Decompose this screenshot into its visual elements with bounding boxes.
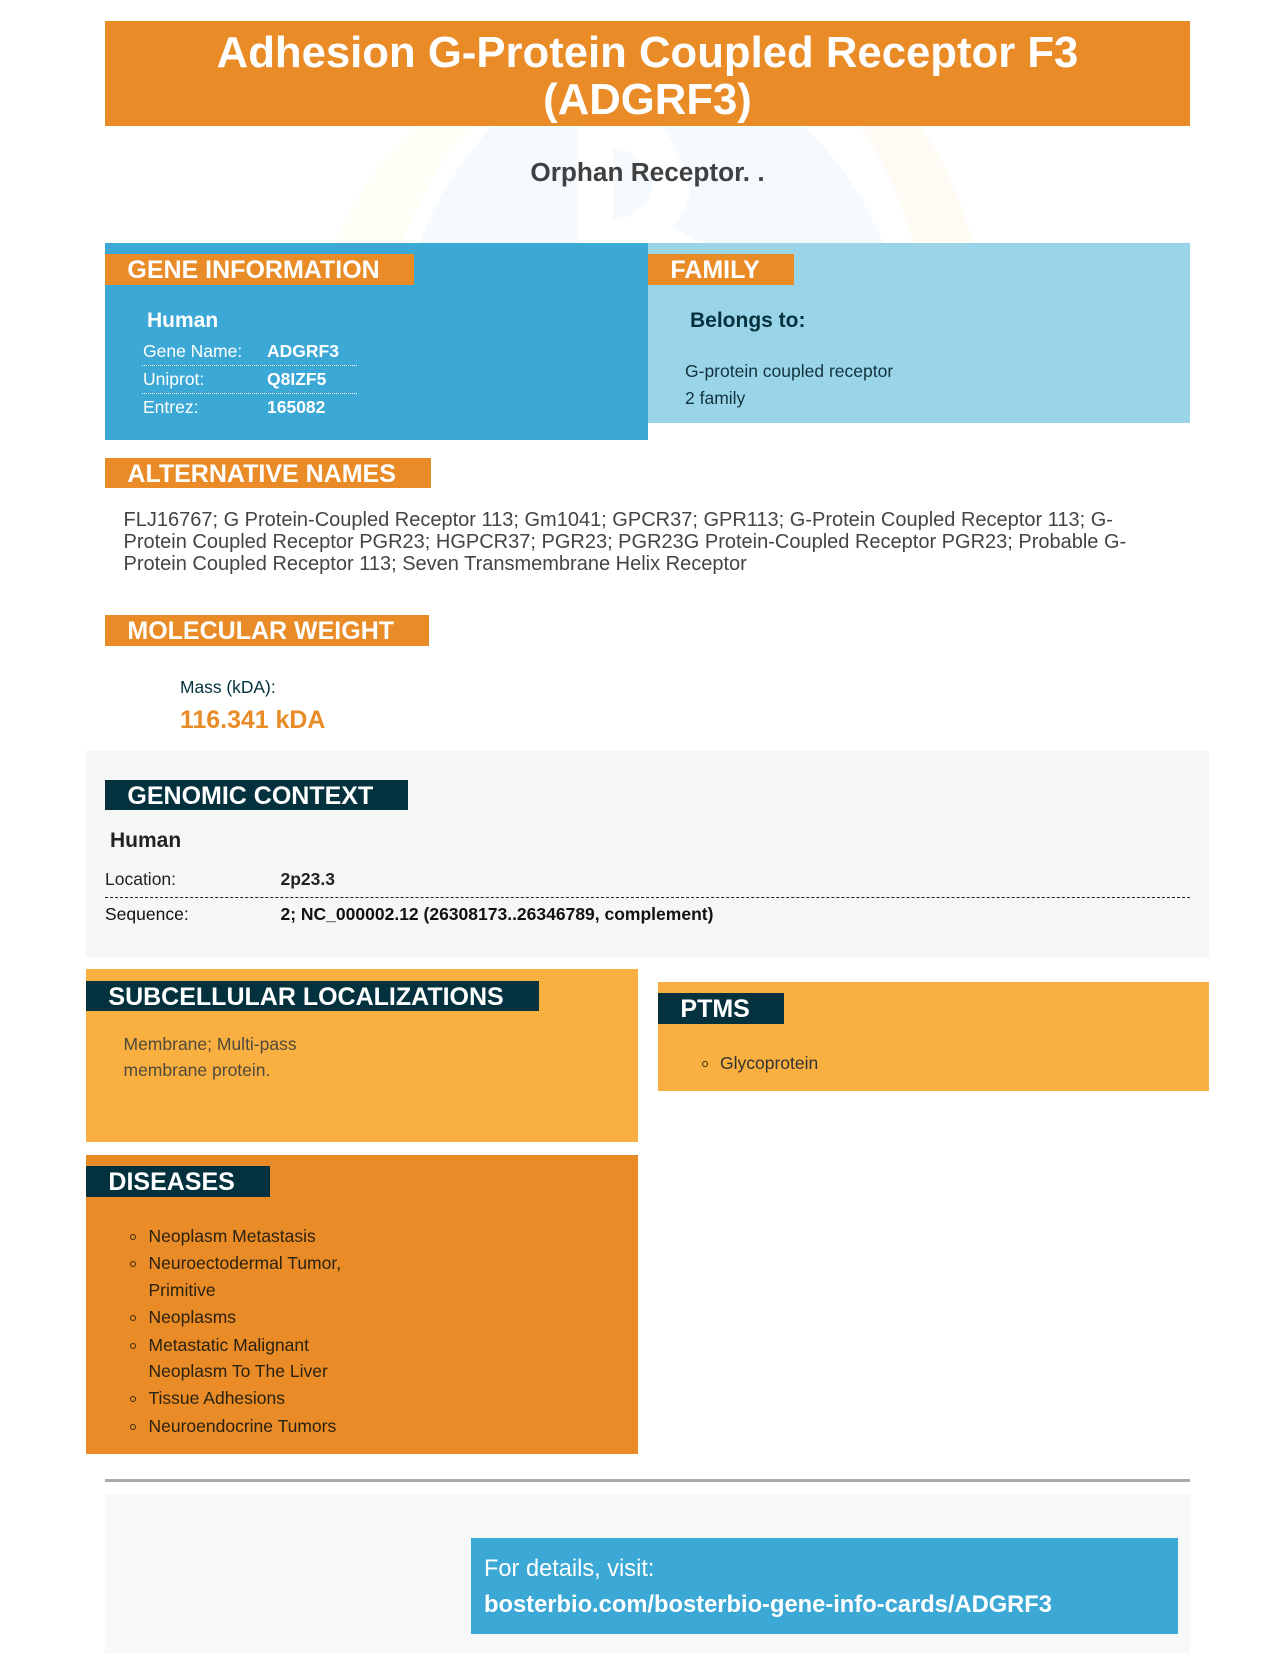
family text: 2 family	[685, 388, 745, 408]
disease list: Neoplasm Metastasis	[148, 1226, 316, 1246]
callout url: bosterbio.com/bosterbio-gene-info-cards/ADGRF3	[484, 1592, 1052, 1618]
subtitle: Orphan Receptor. .	[530, 157, 765, 187]
alternative names text: FLJ16767; G Protein-Coupled Receptor 113; Gm1041; GPCR37; GPR113; G-Protein Coupled Receptor 113; G-	[124, 509, 1113, 531]
family text	[685, 361, 893, 408]
alternative names text	[124, 509, 1126, 575]
row: entrez	[143, 397, 325, 417]
row: entrez: Entrez:	[143, 397, 198, 417]
species label: Human	[110, 829, 181, 852]
row: sequence: Sequence:	[105, 904, 189, 924]
disease list: Neuroectodermal Tumor,	[148, 1253, 341, 1273]
disease list: Tissue Adhesions	[148, 1388, 285, 1408]
title banner: (ADGRF3)	[543, 75, 752, 124]
localization text	[124, 1034, 297, 1080]
disease list: Primitive	[148, 1280, 216, 1300]
alternative names text: Protein Coupled Receptor 113; Seven Transmembrane Helix Receptor	[124, 553, 747, 575]
ptm list item: Glycoprotein	[720, 1053, 818, 1073]
heading: ptms	[658, 993, 784, 1024]
callout: details link	[471, 1538, 1178, 1634]
heading: ptms: PTMS	[680, 995, 750, 1023]
panel: genomic context	[86, 751, 1209, 957]
species label: Human	[147, 309, 218, 332]
heading: gene information: GENE INFORMATION	[127, 256, 380, 284]
row: uniprot: Uniprot:	[143, 369, 204, 389]
watermark logo	[336, 126, 973, 243]
heading: diseases	[86, 1166, 270, 1197]
panel: ptms	[658, 982, 1209, 1091]
row: entrez: 165082	[267, 397, 325, 417]
belongs to label: Belongs to:	[690, 309, 806, 332]
row: gene name	[142, 337, 357, 366]
disease list	[130, 1226, 341, 1436]
heading: genomic context: GENOMIC CONTEXT	[127, 782, 373, 810]
callout label: For details, visit:	[484, 1556, 654, 1582]
mass label: Mass (kDA):	[180, 677, 276, 697]
localization text: Membrane; Multi-pass	[124, 1034, 297, 1054]
row: location	[105, 864, 1190, 898]
alternative names text: Protein Coupled Receptor PGR23; HGPCR37; PGR23; PGR23G Protein-Coupled Receptor PGR23; Probable G-	[124, 531, 1126, 553]
family text: G-protein coupled receptor	[685, 361, 893, 381]
row: location: 2p23.3	[280, 869, 335, 889]
disease list: Neoplasm To The Liver	[148, 1361, 328, 1381]
title banner: Adhesion G-Protein Coupled Receptor F3	[217, 28, 1078, 77]
heading: alternative names: ALTERNATIVE NAMES	[127, 460, 396, 488]
panel: diseases	[86, 1155, 638, 1454]
localization text: membrane protein.	[124, 1060, 270, 1080]
disease list: Neuroendocrine Tumors	[148, 1416, 336, 1436]
row: gene name: ADGRF3	[267, 341, 339, 361]
heading: molecular weight: MOLECULAR WEIGHT	[127, 617, 394, 645]
row: sequence: 2; NC_000002.12 (26308173..26346789, complement)	[280, 904, 713, 924]
panel: subcellular localizations	[86, 969, 638, 1142]
disease list: Neoplasms	[148, 1307, 236, 1327]
panel: gene information	[105, 243, 648, 440]
heading: family: FAMILY	[670, 256, 760, 284]
heading: family	[648, 254, 794, 285]
heading: subcellular localizations: SUBCELLULAR LOCALIZATIONS	[108, 983, 504, 1011]
disease list: Metastatic Malignant	[148, 1335, 309, 1355]
row: uniprot: Q8IZF5	[267, 369, 326, 389]
mass value: 116.341 kDA	[180, 706, 325, 734]
row: uniprot	[142, 365, 357, 394]
footer panel	[105, 1494, 1190, 1653]
panel: family	[648, 243, 1190, 423]
row: location: Location:	[105, 869, 176, 889]
heading: diseases: DISEASES	[108, 1168, 235, 1196]
title banner	[105, 21, 1190, 126]
row: gene name: Gene Name:	[143, 341, 242, 361]
